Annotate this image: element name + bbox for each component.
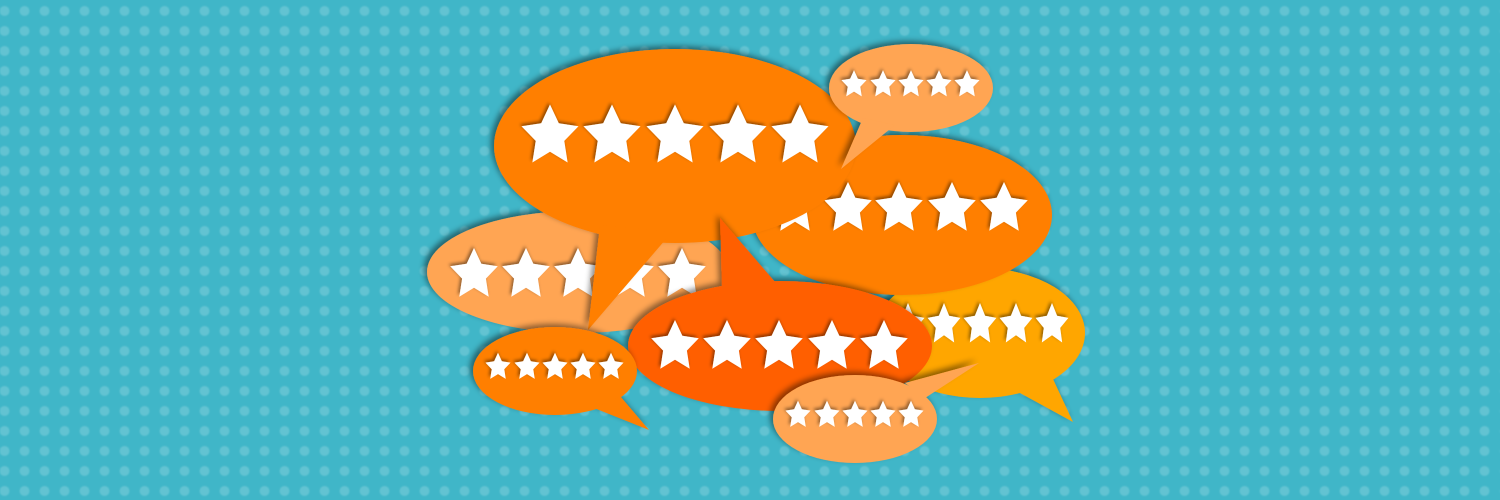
bubble: large orange — [494, 49, 856, 330]
bubble: red-orange — [628, 218, 932, 411]
bubble: light orange left — [427, 211, 729, 333]
bubble: amber — [875, 268, 1085, 422]
bubble: orange right — [752, 135, 1052, 295]
bubble: small orange bottom left — [473, 327, 649, 430]
bubble: small light orange top — [829, 44, 993, 169]
bubble: small light orange bottom — [773, 363, 979, 463]
